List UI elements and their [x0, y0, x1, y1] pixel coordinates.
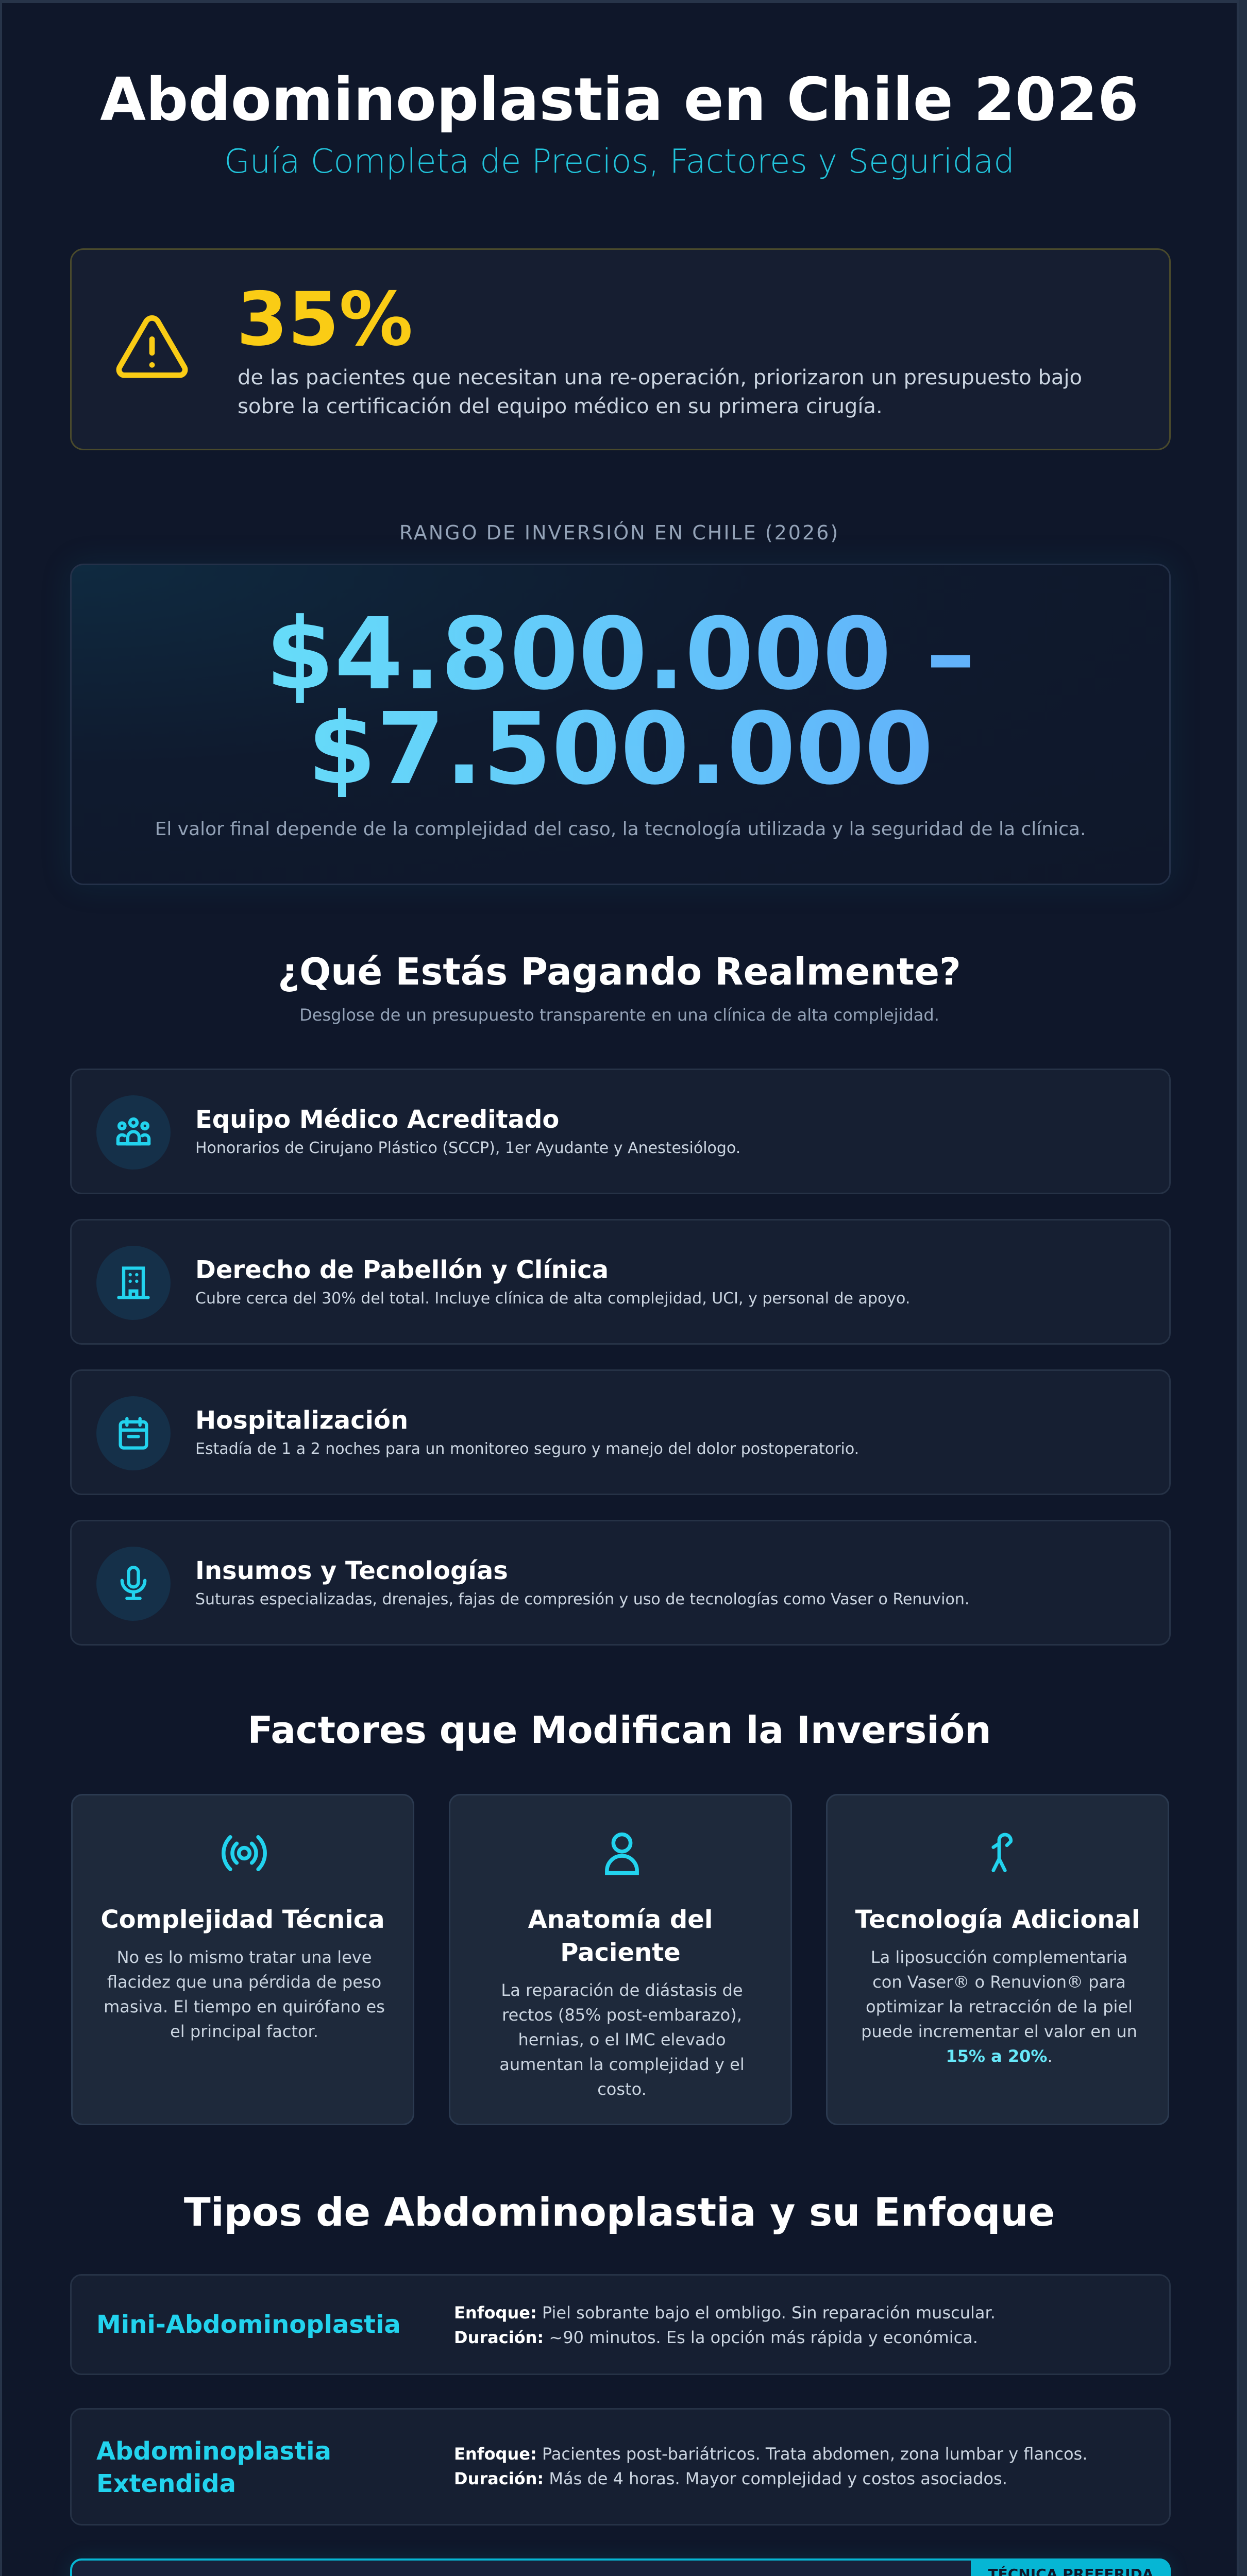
- card text: Suturas especializadas, drenajes, fajas de compresión y uso de tecnologías como Vaser o Renuvion.: [195, 1590, 969, 1608]
- price value: $7.500.000: [308, 692, 933, 807]
- price value: $4.800.000 –: [265, 597, 975, 712]
- icon: warning: [116, 315, 188, 378]
- factor card: anatomia: [449, 1794, 792, 2125]
- type name: Mini-Abdominoplastia: [96, 2310, 401, 2339]
- icon: tech: [991, 1833, 1013, 1872]
- factor title: Tecnología Adicional: [855, 1905, 1140, 1934]
- card title: Equipo Médico Acreditado: [195, 1105, 559, 1134]
- card: pabellon: [70, 1219, 1171, 1345]
- card text: Honorarios de Cirujano Plástico (SCCP), 1er Ayudante y Anestesiólogo.: [195, 1139, 740, 1157]
- title: Abdominoplastia en Chile 2026: [100, 65, 1139, 134]
- card title: Hospitalización: [195, 1406, 408, 1435]
- type details: Duración: ~90 minutos. Es la opción más rápida y económica.: [454, 2328, 978, 2347]
- card text: Estadía de 1 a 2 noches para un monitoreo seguro y manejo del dolor postoperatorio.: [195, 1440, 859, 1458]
- stat text: de las pacientes que necesitan una re-operación, priorizaron un presupuesto bajo sobre la certificación del equipo médico en su primera cirugía.: [238, 366, 1082, 418]
- type name: Extendida: [96, 2469, 236, 2498]
- panel: alert statistic: [70, 248, 1171, 450]
- factor card: complejidad: [71, 1794, 414, 2125]
- card: equipo medico: [70, 1069, 1171, 1194]
- icon: person: [605, 1832, 639, 1875]
- type card: lipo 360: [70, 2558, 1171, 2576]
- factor title: Anatomía del: [528, 1905, 713, 1934]
- subtitle: Guía Completa de Precios, Factores y Seguridad: [224, 143, 1015, 181]
- card text: Cubre cerca del 30% del total. Incluye clínica de alta complejidad, UCI, y personal de apoyo.: [195, 1290, 910, 1308]
- factor text: No es lo mismo tratar una leve flacidez que una pérdida de peso masiva. El tiempo en quirófano es el principal factor.: [104, 1947, 385, 2041]
- price value: [72, 607, 1169, 797]
- heading: factors: Factores que Modifican la Inversión: [247, 1708, 991, 1752]
- type name: Abdominoplastia: [96, 2437, 331, 2466]
- factor text: La reparación de diástasis de rectos (85% post-embarazo), hernias, o el IMC elevado aumentan la complejidad y el costo.: [499, 1980, 745, 2099]
- icon: signal: [222, 1835, 267, 1871]
- icon: calendar: [96, 1396, 171, 1470]
- stat number: 35%: [237, 276, 413, 362]
- type details: Duración: Más de 4 horas. Mayor complejidad y costos asociados.: [454, 2469, 1007, 2488]
- heading: what you pay: ¿Qué Estás Pagando Realmente?: [278, 950, 961, 993]
- heading: types: Tipos de Abdominoplastia y su Enfoque: [184, 2189, 1055, 2235]
- factor title: Complejidad Técnica: [100, 1905, 385, 1934]
- panel: price range: [70, 564, 1171, 885]
- card title: Insumos y Tecnologías: [195, 1556, 508, 1585]
- type card: extendida: [70, 2408, 1171, 2526]
- type details: [454, 2444, 1087, 2488]
- card: hospitalizacion: [70, 1369, 1171, 1495]
- badge: [971, 2558, 1171, 2576]
- price note: El valor final depende de la complejidad del caso, la tecnología utilizada y la seguridad de la clínica.: [155, 819, 1086, 840]
- icon: microphone: [96, 1547, 171, 1621]
- type name: [96, 2437, 331, 2498]
- card title: Derecho de Pabellón y Clínica: [195, 1256, 609, 1284]
- factor card: tecnologia: [826, 1794, 1169, 2125]
- icon: team: [96, 1095, 171, 1170]
- card: insumos: [70, 1520, 1171, 1646]
- type details: Enfoque: Piel sobrante bajo el ombligo. Sin reparación muscular.: [454, 2303, 996, 2323]
- type details: [454, 2303, 996, 2347]
- subheading: Desglose de un presupuesto transparente en una clínica de alta complejidad.: [299, 1005, 939, 1025]
- type card: mini: [70, 2274, 1171, 2375]
- price label: RANGO DE INVERSIÓN EN CHILE (2026): [399, 521, 839, 544]
- type details: Enfoque: Pacientes post-bariátricos. Trata abdomen, zona lumbar y flancos.: [454, 2444, 1087, 2464]
- factor title: Paciente: [560, 1938, 681, 1967]
- factor text: La liposucción complementaria con Vaser® o Renuvion® para optimizar la retracción de la piel puede incrementar el valor en un 15% a 20%.: [861, 1947, 1137, 2066]
- icon: building: [96, 1246, 171, 1320]
- factor title: [528, 1905, 713, 1967]
